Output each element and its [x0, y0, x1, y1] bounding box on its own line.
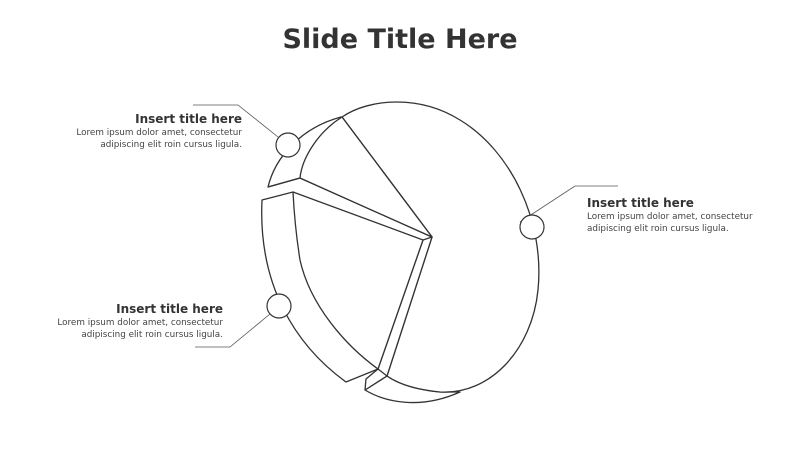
label: bottom left: Insert title here — [116, 302, 223, 316]
label: right: Lorem ipsum dolor amet, consectetur — [587, 212, 753, 222]
marker circles — [267, 133, 544, 318]
label: right — [587, 196, 753, 234]
label: right: Insert title here — [587, 196, 694, 210]
leader lines — [193, 105, 618, 347]
big slice — [342, 102, 539, 403]
left slice — [262, 192, 423, 382]
title: Slide Title Here — [282, 24, 518, 55]
label: top left: adipiscing elit roin cursus ligula. — [100, 140, 242, 150]
label: right: adipiscing elit roin cursus ligula. — [587, 224, 729, 234]
label: bottom left: adipiscing elit roin cursus ligula. — [81, 330, 223, 340]
label: bottom left — [57, 302, 223, 340]
label: top left: Lorem ipsum dolor amet, consectetur — [76, 128, 242, 138]
label: top left: Insert title here — [135, 112, 242, 126]
label: top left — [76, 112, 242, 150]
label: bottom left: Lorem ipsum dolor amet, consectetur — [57, 318, 223, 328]
top slice — [268, 117, 432, 237]
